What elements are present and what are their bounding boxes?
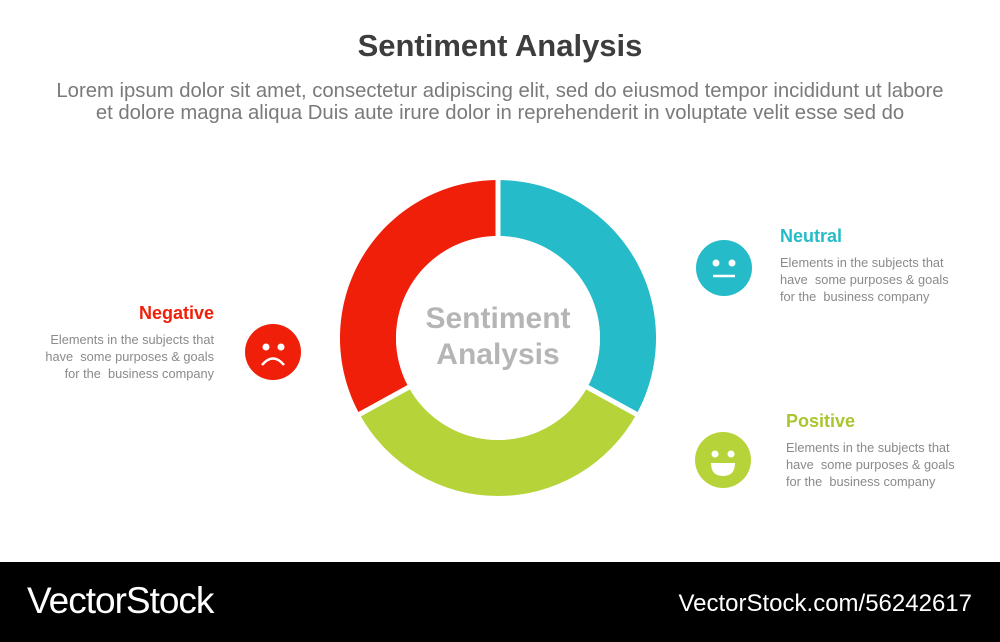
text: positive (786, 411, 955, 489)
subtitle: et dolore magna aliqua Duis aute irure dolor in reprehenderit in voluptate velit esse sed do (96, 102, 904, 124)
text: neutral (780, 226, 949, 304)
footer bar (0, 562, 1000, 642)
icon: neutral face (696, 240, 752, 296)
text: positive: for the business company (786, 474, 935, 489)
text: negative (45, 303, 214, 381)
subtitle (56, 80, 944, 124)
donut chart: Sentiment (425, 302, 571, 335)
text: positive: Elements in the subjects that (786, 440, 950, 455)
text: negative: have some purposes & goals (45, 349, 214, 364)
text: positive: have some purposes & goals (786, 457, 955, 472)
icon: sad face (245, 324, 301, 380)
text: neutral: Neutral (780, 226, 842, 246)
footer logo: VectorStock (27, 580, 213, 621)
donut chart: Analysis (436, 338, 560, 371)
text: positive: Positive (786, 411, 855, 431)
text: negative: Negative (139, 303, 214, 323)
text: neutral: Elements in the subjects that (780, 255, 944, 270)
subtitle: Lorem ipsum dolor sit amet, consectetur adipiscing elit, sed do eiusmod tempor incididunt ut labore (56, 80, 944, 102)
text: neutral: for the business company (780, 289, 929, 304)
footer url: VectorStock.com/56242617 (678, 590, 972, 617)
text: negative: Elements in the subjects that (50, 332, 214, 347)
icon: happy face (695, 432, 751, 488)
text: negative: for the business company (65, 366, 214, 381)
text: neutral: have some purposes & goals (780, 272, 949, 287)
title: Sentiment Analysis (358, 28, 642, 63)
